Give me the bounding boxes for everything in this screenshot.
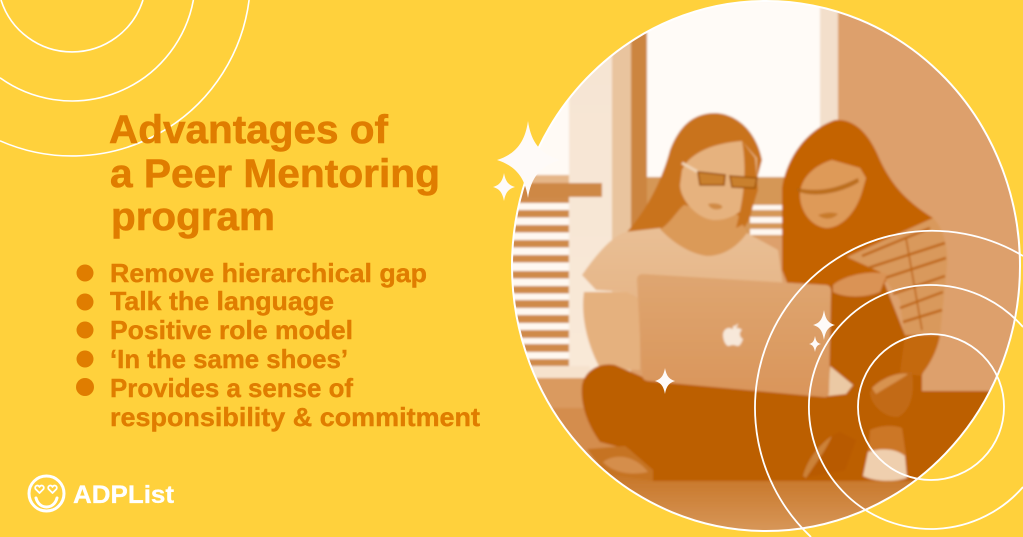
photo wall — [629, 12, 1019, 450]
photo: two women with a laptop, orange duotone — [505, 0, 1023, 537]
sparkle: laptop right small — [809, 336, 821, 352]
decorative concentric circles: bottom right — [755, 231, 1023, 537]
list item: sense of responsibility: responsibility & commitment — [110, 402, 480, 432]
sparkle: laptop bottom — [655, 368, 675, 394]
photo blinds — [505, 197, 786, 371]
title: a Peer Mentoring — [110, 152, 440, 196]
list item: remove hierarchical gap: Remove hierarchical gap — [110, 258, 427, 288]
decorative concentric circles: top left — [0, 0, 249, 156]
photo: jeans and lower bodies — [582, 272, 940, 481]
photo: right woman hair — [782, 120, 933, 300]
title: program — [111, 195, 275, 239]
photo: shoes and ankles — [587, 426, 907, 481]
photo: left woman arm — [583, 292, 640, 370]
photo: right woman face — [797, 160, 866, 228]
photo sill and floor — [532, 364, 989, 530]
list item: talk the language: Talk the language — [110, 286, 334, 316]
left woman glasses — [682, 163, 757, 188]
photo: right woman forearm and hands — [828, 273, 940, 417]
photo: left woman shirt and neck — [582, 205, 785, 300]
photo window — [505, 0, 838, 380]
sparkle: large left — [497, 121, 560, 198]
title: Advantages of — [109, 108, 389, 152]
photo: right woman striped shirt — [847, 218, 947, 342]
list item: positive role model: Positive role model — [110, 315, 353, 345]
sparkle: small left — [493, 173, 515, 201]
list item: sense of responsibility — [76, 373, 480, 432]
photo: left woman hair — [627, 113, 762, 240]
title — [109, 108, 440, 239]
photo: laptop — [637, 274, 831, 397]
logo: ADPList — [29, 476, 175, 511]
sparkles — [493, 121, 835, 394]
list item: in the same shoes: ‘In the same shoes’ — [110, 344, 348, 374]
bullet list — [76, 258, 480, 432]
photo circle outline — [512, 1, 1020, 531]
icon: smiley with heart eyes — [29, 476, 64, 511]
photo: left woman face — [680, 141, 758, 228]
list item: sense of responsibility: Provides a sense of — [110, 373, 353, 403]
sparkle: laptop right large — [813, 310, 835, 340]
logo wordmark: ADPList — [73, 481, 175, 509]
